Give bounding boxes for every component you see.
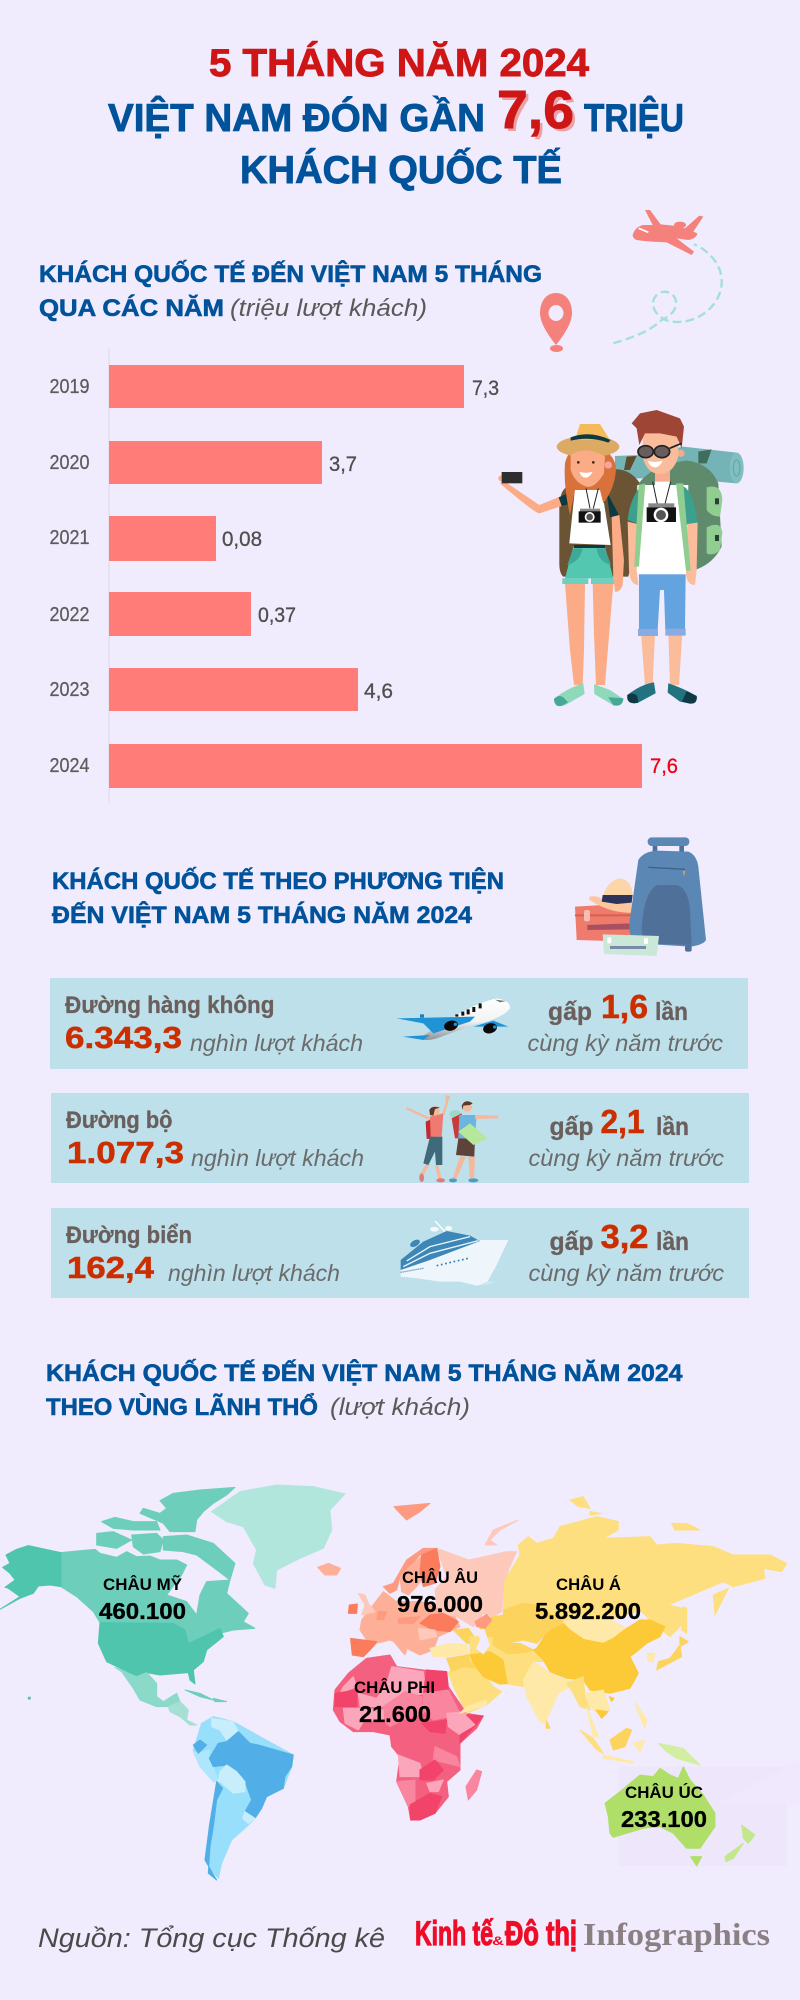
panel: by sea: lần [656,1228,689,1256]
panel: by air: 1,6 [601,988,648,1025]
panel: by air: lần [655,998,688,1026]
logo: Kinh te & Do thi Infographics: Kinh tế [415,1915,493,1953]
panel: by sea: Đường biển [66,1222,192,1249]
bar 2022: 2022 [50,604,90,626]
label: Asia: 5.892.200 [535,1598,641,1624]
heading: arrivals over the years: QUA CÁC NĂM [39,294,224,322]
bar 2021: 2021 [50,527,90,549]
girl [498,424,624,706]
logo: Kinh te & Do thi Infographics [415,1915,770,1953]
label: Europe [397,1568,483,1617]
panel: by sea: gấp [550,1228,594,1256]
panel: by air: nghìn lượt khách [190,1030,363,1056]
title: 7,6 [497,80,574,140]
bar 2023 [50,668,393,711]
title: KHÁCH QUỐC TẾ [240,147,562,192]
world map [0,1485,800,1880]
title [108,41,684,192]
panel: by road: nghìn lượt khách [191,1145,364,1171]
map: Asia and Oceania [470,1497,800,1866]
bar 2019: 7,3 [472,377,499,400]
panel: by sea: nghìn lượt khách [168,1260,340,1286]
panel: by air [50,978,748,1069]
label: Europe: 976.000 [397,1591,483,1617]
panel: by road: cùng kỳ năm trước [528,1145,725,1171]
bar 2024: 2024 [50,755,90,777]
title: 5 THÁNG NĂM 2024 [209,41,589,85]
panel: by sea: 3,2 [600,1218,648,1255]
heading: arrivals over the years [39,260,542,322]
panel: by road: gấp [550,1113,594,1141]
icon: luggage [575,837,706,956]
label: Africa: 21.600 [359,1701,431,1727]
panel: by sea: 162,4 [67,1250,155,1285]
logo: Kinh te & Do thi Infographics: Đô thị [505,1915,577,1953]
bar 2019 [50,365,499,408]
icon: cruise ship [401,1221,508,1286]
panel: by air: 6.343,3 [65,1020,182,1055]
icon: plane with dashed route [613,210,722,343]
bar 2020: 2020 [50,452,90,474]
label: Australia [621,1783,707,1832]
label: Europe: CHÂU ÂU [402,1568,478,1587]
label: America: 460.100 [99,1598,186,1624]
panel: by sea: cùng kỳ năm trước [528,1260,725,1286]
bar 2019: 2019 [50,376,90,398]
panel: by road [51,1093,749,1183]
logo: Kinh te & Do thi Infographics: & [492,1934,504,1948]
bar 2020 [50,441,357,484]
heading: arrivals by transport: KHÁCH QUỐC TẾ THEO PHƯƠNG TIỆN [52,867,504,895]
heading: arrivals by region [46,1359,683,1421]
panel: by road: lần [656,1113,689,1141]
bar 2023: 2023 [50,679,90,701]
icon: map pin [540,293,572,352]
heading: arrivals by transport: ĐẾN VIỆT NAM 5 THÁNG NĂM 2024 [52,901,473,929]
panel: by road: 1.077,3 [67,1135,184,1170]
bar 2022: 0,37 [258,604,296,627]
label: America [99,1574,186,1624]
label: America: CHÂU MỸ [103,1574,183,1594]
illustration: two backpackers [498,410,744,706]
panel: by sea [51,1208,749,1298]
icon: airplane [397,998,510,1040]
heading: arrivals by region: THEO VÙNG LÃNH THỔ [46,1393,318,1421]
heading: arrivals by region: (lượt khách) [330,1394,470,1421]
title: 7,6 [500,83,577,143]
label: Asia [535,1575,641,1624]
icon: two hikers with map [407,1095,498,1182]
boy [627,410,698,704]
bar 2021 [50,516,262,561]
logo: Kinh te & Do thi Infographics: Infographics [583,1916,770,1952]
heading: arrivals by region: KHÁCH QUỐC TẾ ĐẾN VIỆT NAM 5 THÁNG NĂM 2024 [46,1359,683,1387]
title: TRIỆU [584,96,684,140]
panel: by road: 2,1 [600,1103,644,1140]
panel: by air: gấp [548,998,592,1026]
panel: by road: Đường bộ [66,1107,172,1134]
bar 2024 [50,744,678,788]
panel: by air: Đường hàng không [65,992,274,1019]
map: Americas [0,1485,345,1880]
label: Australia: 233.100 [621,1806,707,1832]
bar 2024: 7,6 [650,755,678,778]
bar 2022 [50,592,296,636]
bar 2020: 3,7 [329,453,357,476]
heading: arrivals over the years: (triệu lượt khách) [230,295,427,322]
source note: Nguồn: Tổng cục Thống kê [38,1923,385,1953]
label: Asia: CHÂU Á [556,1575,621,1594]
map: Europe and Africa [333,1503,518,1820]
bar 2023: 4,6 [364,680,393,703]
bar chart: visitors by year [50,348,678,803]
panel: by air: cùng kỳ năm trước [528,1030,724,1056]
label: Australia: CHÂU ÚC [625,1783,703,1802]
heading: arrivals over the years: KHÁCH QUỐC TẾ ĐẾN VIỆT NAM 5 THÁNG [39,260,542,288]
label: Africa: CHÂU PHI [354,1678,435,1697]
label: Africa [354,1678,435,1727]
title: VIỆT NAM ĐÓN GẦN [108,96,485,140]
bar 2021: 0,08 [222,528,262,551]
heading: arrivals by transport [52,867,504,929]
